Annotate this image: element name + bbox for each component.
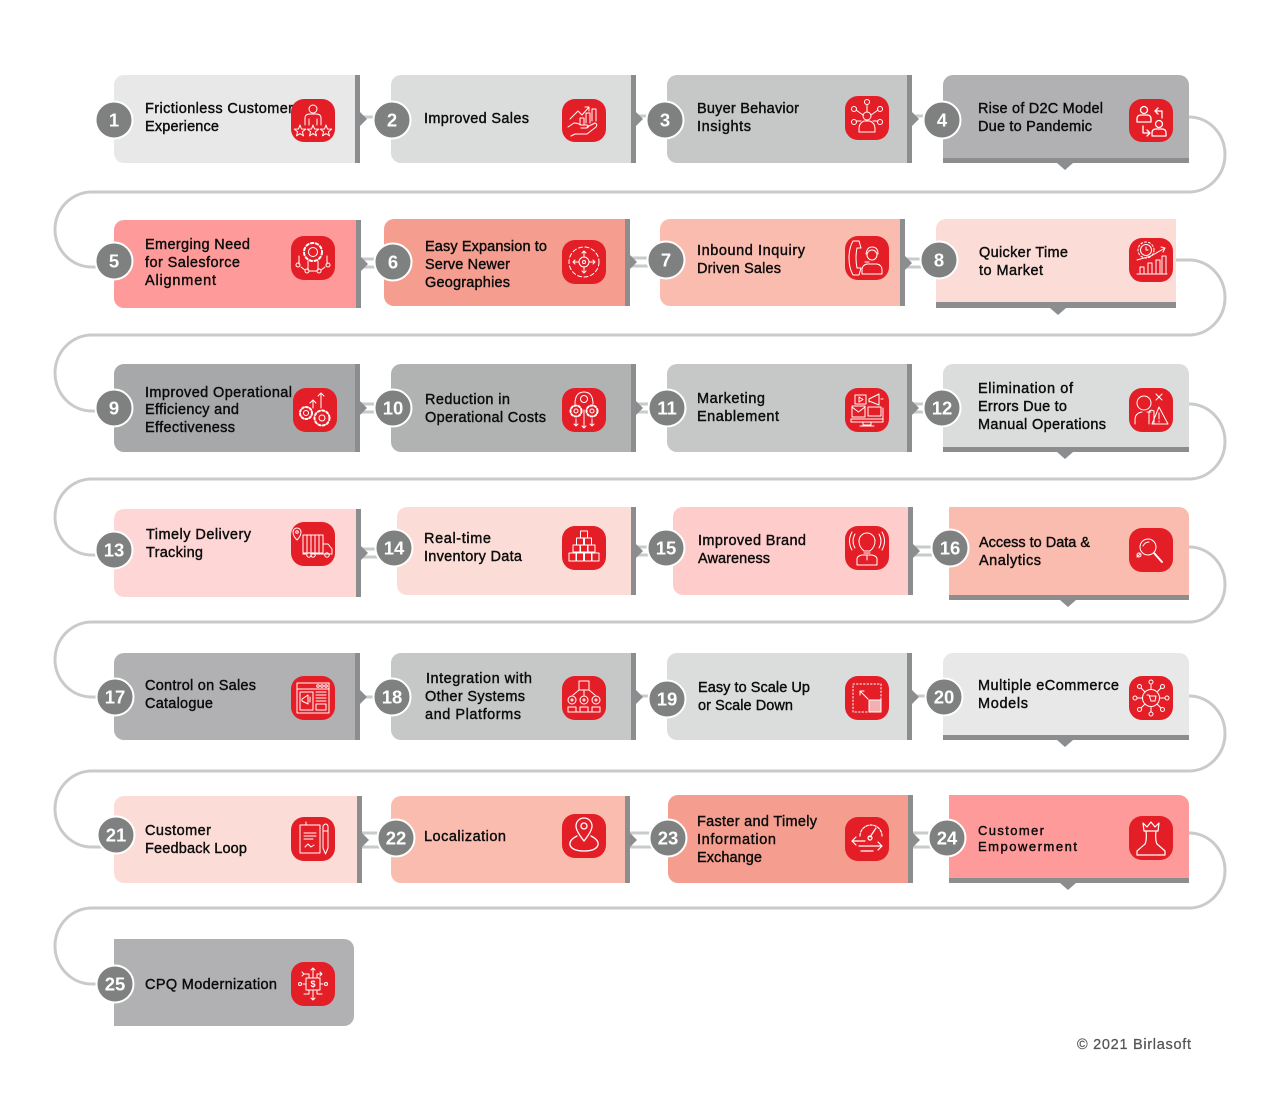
label 9: Effectiveness: [145, 420, 235, 436]
card 21: Customer Feedback Loop: [98, 796, 369, 883]
icon: buyer with network: [845, 96, 889, 140]
label 9: Efficiency and: [145, 402, 239, 418]
label 13: Tracking: [146, 545, 203, 561]
card 18: Integration with Other Systems and Platforms: [374, 653, 643, 740]
card 24: Customer Empowerment: [928, 795, 1189, 890]
icon: marketing monitor: [845, 388, 889, 432]
number 7: 7: [661, 250, 671, 270]
number 23: [650, 820, 686, 856]
card 3: Buyer Behavior Insights: [646, 75, 919, 163]
icon: gears and arrows: [293, 388, 337, 432]
number 24: [928, 820, 966, 856]
card 6: Easy Expansion to Serve Newer Geographies: [374, 219, 637, 306]
number 12: 12: [932, 398, 952, 418]
label 9: Improved Operational: [145, 385, 292, 401]
label 21: Feedback Loop: [145, 841, 247, 857]
number 11: 11: [657, 398, 677, 418]
number 3: 3: [660, 110, 670, 130]
icon: stacked boxes: [562, 526, 606, 570]
number 24: 24: [937, 828, 958, 848]
card 2: Improved Sales: [374, 75, 643, 163]
label 16: Analytics: [979, 553, 1041, 569]
label 14: Inventory Data: [424, 549, 523, 565]
card 15: Improved Brand Awareness: [648, 507, 920, 595]
number 20: 20: [934, 686, 954, 708]
card 20: Multiple eCommerce Models: [926, 653, 1189, 747]
label 11: Enablement: [697, 409, 779, 425]
label 12: Manual Operations: [978, 417, 1106, 433]
icon: idea broadcast: [845, 526, 889, 570]
number 10: 10: [383, 398, 403, 418]
card 4: Rise of D2C Model Due to Pandemic: [924, 75, 1189, 170]
number 4: 4: [937, 110, 948, 130]
number 12: [924, 390, 960, 426]
number 15: [648, 530, 684, 566]
icon: crowned figure: [1129, 816, 1173, 860]
label 6: Geographies: [425, 275, 510, 291]
icon: person with stars: [291, 99, 335, 142]
number 23: 23: [658, 828, 678, 848]
number 1: 1: [109, 110, 119, 130]
number 13: 13: [104, 540, 124, 560]
label 5: Alignment: [145, 273, 216, 289]
number 6: [374, 244, 412, 280]
label 7: Inbound Inquiry: [697, 243, 806, 259]
label 17: Catalogue: [145, 696, 213, 712]
number 11: [648, 390, 686, 426]
label 13: Timely Delivery: [146, 527, 252, 543]
card 1: Frictionless Customer Experience: [96, 75, 367, 163]
label 23: Exchange: [697, 850, 762, 866]
card 13: Timely Delivery Tracking: [96, 509, 368, 597]
number 22: [378, 820, 414, 856]
label 3: Buyer Behavior: [697, 101, 799, 117]
number 14: 14: [384, 538, 405, 558]
number 22: 22: [386, 828, 406, 848]
icon: dollar chip: $: [310, 979, 316, 989]
icon: expanding target: [562, 240, 606, 284]
icon: location pin: [562, 814, 606, 858]
number 18: 18: [382, 686, 402, 708]
card 5: Emerging Need for Salesforce Alignment: [96, 220, 368, 308]
label 1: Frictionless Customer: [145, 101, 293, 117]
icon: delivery truck with pin: [291, 522, 335, 566]
label 5: for Salesforce: [145, 255, 240, 271]
label 16: Access to Data &: [979, 535, 1090, 551]
label 18: and Platforms: [425, 707, 521, 723]
icon: catalogue window: [291, 676, 335, 720]
label 4: Due to Pandemic: [978, 119, 1092, 135]
number 5: [96, 242, 132, 280]
label 20: Multiple eCommerce: [978, 678, 1119, 694]
icon: person with warning: [1129, 388, 1173, 432]
label 1: Experience: [145, 119, 219, 135]
label 18: Other Systems: [425, 689, 525, 705]
card 12: Elimination of Errors Due to Manual Operations: [924, 364, 1189, 459]
icon: stopwatch and bars: [1129, 238, 1173, 282]
label 7: Driven Sales: [697, 261, 781, 277]
step connectors between cards: [360, 116, 938, 847]
label 14: Real-time: [424, 531, 491, 547]
label 24: Empowerment: [978, 839, 1077, 854]
card 14: Real-time Inventory Data: [376, 507, 643, 595]
card 25: CPQ Modernization: [96, 939, 354, 1026]
number 14: [376, 530, 412, 566]
icon: integration people: [562, 676, 606, 720]
number 16: [932, 530, 968, 566]
label 23: Information: [697, 832, 776, 848]
label 11: Marketing: [697, 391, 765, 407]
label 23: Faster and Timely: [697, 814, 818, 830]
card 19: Easy to Scale Up or Scale Down: [648, 653, 919, 740]
label 17: Control on Sales: [145, 678, 256, 694]
number 25: 25: [105, 974, 125, 994]
number 25: [96, 966, 134, 1002]
label 5: Emerging Need: [145, 237, 250, 253]
label 6: Serve Newer: [425, 257, 510, 273]
number 3: [646, 102, 684, 138]
number 8: [920, 242, 958, 278]
icon: cart network: [1129, 676, 1173, 720]
icon: resize square: [845, 676, 889, 720]
number 8: 8: [934, 250, 944, 270]
label 18: Integration with: [426, 671, 532, 687]
label 12: Errors Due to: [978, 399, 1067, 415]
label 4: Rise of D2C Model: [978, 101, 1103, 117]
number 6: 6: [388, 252, 398, 272]
number 5: 5: [109, 250, 119, 272]
label 2: Improved Sales: [424, 111, 529, 127]
icon: document and pen: [291, 817, 335, 861]
icon: growth in hand: [562, 99, 606, 142]
number 4: [924, 102, 960, 138]
number 7: [648, 242, 684, 278]
label 8: to Market: [979, 263, 1043, 279]
number 21: 21: [106, 824, 126, 846]
label 19: or Scale Down: [698, 698, 793, 714]
label 25: CPQ Modernization: [145, 977, 277, 993]
number 2: [374, 102, 410, 138]
label 22: Localization: [424, 829, 506, 845]
label 12: Elimination of: [978, 381, 1074, 397]
number 21: [98, 816, 134, 854]
number 16: 16: [940, 538, 960, 558]
label 6: Easy Expansion to: [425, 239, 547, 255]
label 21: Customer: [145, 823, 211, 839]
card 7: Inbound Inquiry Driven Sales: [648, 219, 912, 306]
number 20: [926, 678, 962, 716]
label 10: Operational Costs: [425, 410, 546, 426]
number 19: [648, 680, 686, 718]
label 20: Models: [978, 696, 1028, 712]
label 10: Reduction in: [425, 392, 510, 408]
icon: speedometer exchange: [845, 817, 889, 861]
number 1: [96, 102, 132, 138]
number 18: [374, 678, 410, 716]
card 9: Improved Operational Efficiency and Effectiveness: [96, 364, 367, 452]
card 11: Marketing Enablement: [648, 364, 919, 452]
number 13: [96, 532, 132, 568]
card 8: Quicker Time to Market: [920, 219, 1176, 315]
icon: phone agent: [845, 236, 889, 280]
card 10: Reduction in Operational Costs: [374, 364, 643, 452]
card 17: Control on Sales Catalogue: [96, 653, 367, 740]
icon: dollar chip: [291, 962, 335, 1006]
number 17: 17: [105, 686, 125, 708]
icon: gears with falling cost: [562, 388, 606, 432]
number 2: 2: [387, 110, 397, 130]
copyright: © 2021 Birlasoft: [1077, 1037, 1191, 1053]
label 19: Easy to Scale Up: [698, 680, 810, 696]
icon: magnifier: [1129, 528, 1173, 572]
number 19: 19: [657, 688, 677, 710]
number 15: 15: [656, 538, 676, 558]
label 15: Awareness: [698, 551, 770, 567]
card 16: Access to Data & Analytics: [932, 507, 1189, 607]
number 9: 9: [109, 398, 119, 418]
number 17: [96, 678, 134, 716]
label 24: Customer: [978, 823, 1045, 838]
number 10: [374, 390, 412, 426]
icon: gear with network: [291, 236, 335, 280]
card 23: Faster and Timely Information Exchange: [650, 795, 920, 883]
label 8: Quicker Time: [979, 245, 1068, 261]
label 3: Insights: [697, 119, 751, 135]
card 22: Localization: [378, 796, 637, 883]
serpentine connector path: [55, 117, 1225, 984]
icon: two people exchanging: [1129, 99, 1173, 142]
label 15: Improved Brand: [698, 533, 806, 549]
number 9: [96, 390, 132, 426]
